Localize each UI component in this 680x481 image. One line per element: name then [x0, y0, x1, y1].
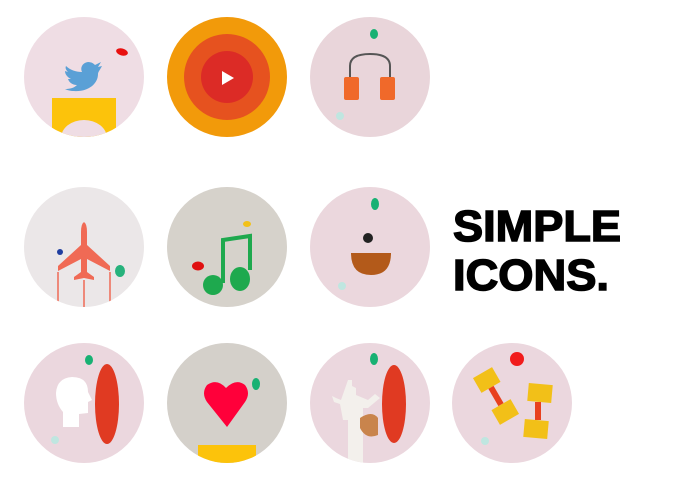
icon: dumbbells [452, 343, 572, 463]
icon: play target [167, 17, 287, 137]
icon: figure with red oval [310, 343, 430, 470]
title [453, 202, 621, 300]
icon: head and red oval [24, 343, 144, 463]
icon: bowl with eye [310, 187, 430, 307]
title: ICONS. [453, 251, 609, 300]
icon: headphones [310, 17, 430, 137]
title: SIMPLE [453, 202, 621, 251]
icon: airplane [24, 187, 144, 310]
icon: music note [167, 187, 287, 307]
icon: heart [167, 343, 287, 470]
icon: twitter [24, 17, 144, 137]
